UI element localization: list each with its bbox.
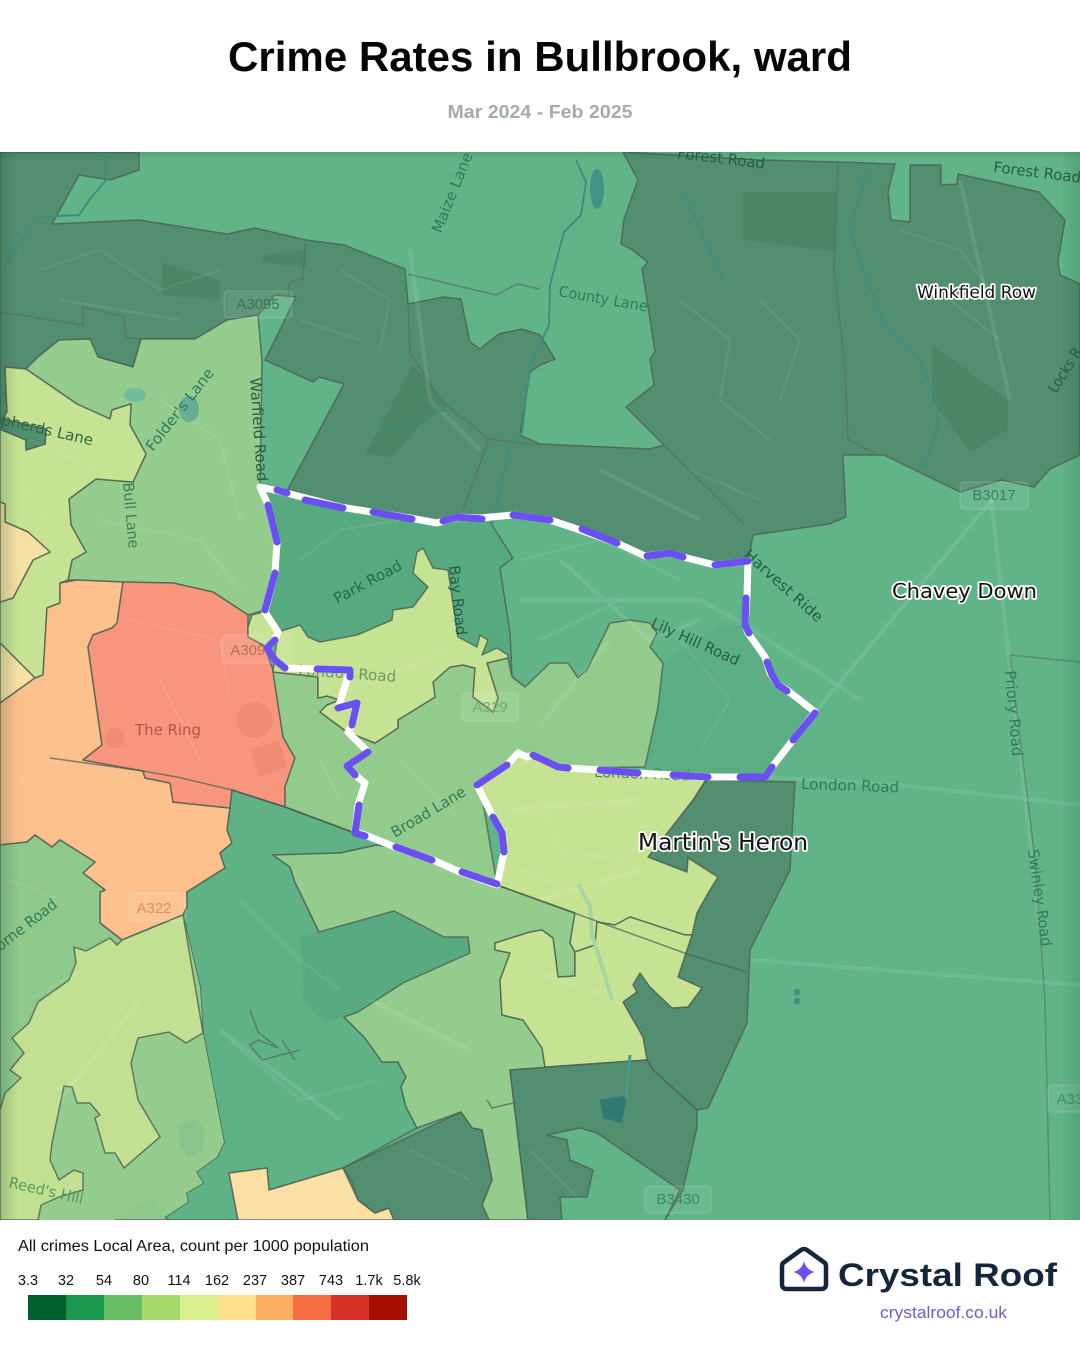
road labels: County Lane — [557, 282, 649, 316]
region: west beige — [0, 502, 50, 602]
road labels: Maize Lane — [428, 150, 477, 235]
place labels: Martin's Heron — [638, 830, 808, 856]
road labels: Warfield Road — [246, 377, 271, 482]
map — [0, 144, 1080, 1220]
region: south light green — [272, 844, 575, 1220]
region: dark north band — [0, 152, 1080, 565]
road labels: Broad Lane — [388, 783, 469, 841]
road labels: Forest Road — [993, 158, 1080, 187]
road labels: Bull Lane — [119, 482, 143, 549]
region: The Ring red — [83, 582, 295, 808]
region: ward west — [249, 492, 512, 666]
region: south-west light green — [0, 835, 224, 1220]
railway — [50, 758, 747, 972]
map: B3430 — [656, 1191, 700, 1208]
legend labels: 237 — [243, 1273, 267, 1289]
map edge vignette — [0, 152, 1080, 1220]
website link: crystalroof.co.uk — [880, 1304, 1008, 1322]
dark patches inside north band — [162, 192, 1008, 457]
ward boundary — [260, 487, 815, 885]
logo: Crystal Roof — [782, 1249, 1057, 1293]
logo: Crystal Roof: Crystal Roof — [838, 1257, 1057, 1293]
map: A322 — [136, 900, 172, 917]
legend labels: 387 — [281, 1273, 305, 1289]
east boundaries — [1010, 655, 1080, 1220]
road labels: Swinley Road — [1024, 848, 1056, 948]
region: orange — [0, 580, 232, 940]
legend labels: 5.8k — [393, 1273, 421, 1289]
legend labels — [18, 1273, 421, 1289]
region: southern yellow-green — [495, 917, 702, 1067]
road labels: Bay Road — [445, 565, 470, 636]
region: central light green — [273, 620, 663, 885]
place labels: Winkfield Row — [917, 283, 1036, 302]
residential streets — [10, 230, 1000, 1200]
road labels: Forest Road — [677, 144, 766, 173]
legend labels: 162 — [205, 1273, 229, 1289]
road labels: London Road — [594, 763, 690, 784]
place labels: Chavey Down — [892, 579, 1037, 603]
region: yellow-green Bullbrook west — [273, 548, 508, 743]
road labels: Harvest Ride — [740, 546, 827, 626]
title: Crime Rates in Bullbrook, ward — [228, 33, 852, 80]
region: Martin's Heron yellow-green — [480, 755, 718, 952]
icon: house with star — [782, 1249, 826, 1289]
legend labels: 743 — [319, 1273, 343, 1289]
roads — [60, 180, 1080, 1120]
legend colour scale — [28, 1295, 407, 1320]
region: southern dark east — [510, 1060, 697, 1220]
region: dark east strip — [623, 780, 795, 1110]
road labels: Park Road — [330, 556, 405, 608]
map: A3095 — [230, 642, 274, 659]
road shields — [128, 291, 1080, 1213]
map: A3095 — [236, 296, 280, 313]
road labels: Priory Road — [1001, 670, 1026, 757]
place labels — [638, 283, 1037, 856]
road labels: London Road — [298, 661, 397, 686]
region: south-west yellow-green — [0, 915, 203, 1220]
region: west yellow-green — [0, 367, 146, 678]
road labels: Folder's Lane — [142, 365, 218, 454]
legend labels: 32 — [58, 1273, 74, 1289]
region: southern dark west — [343, 1112, 492, 1220]
road labels: Reed's Hill — [7, 1173, 85, 1208]
road labels — [0, 144, 1080, 1208]
legend labels: 3.3 — [18, 1273, 38, 1289]
road labels: The Ring — [134, 721, 201, 739]
legend heading: All crimes Local Area, count per 1000 population — [18, 1238, 369, 1255]
road labels: London Road — [801, 775, 899, 796]
legend labels: 54 — [96, 1273, 112, 1289]
legend labels: 80 — [133, 1273, 149, 1289]
road labels: Lily Hill Road — [648, 614, 742, 669]
region: southern beige — [229, 1168, 394, 1220]
region: small dark patch — [0, 419, 46, 450]
subtitle: date range: Mar 2024 - Feb 2025 — [448, 102, 632, 122]
internal dark boundaries — [0, 162, 876, 525]
legend labels: 114 — [167, 1273, 191, 1289]
region: ward south-east — [645, 625, 815, 780]
region: south-central medium green — [166, 789, 418, 1220]
map: B3017 — [972, 487, 1016, 504]
water — [0, 152, 938, 525]
map: A329 — [472, 699, 508, 716]
legend labels: 1.7k — [355, 1273, 383, 1289]
region: west light green — [26, 315, 277, 615]
